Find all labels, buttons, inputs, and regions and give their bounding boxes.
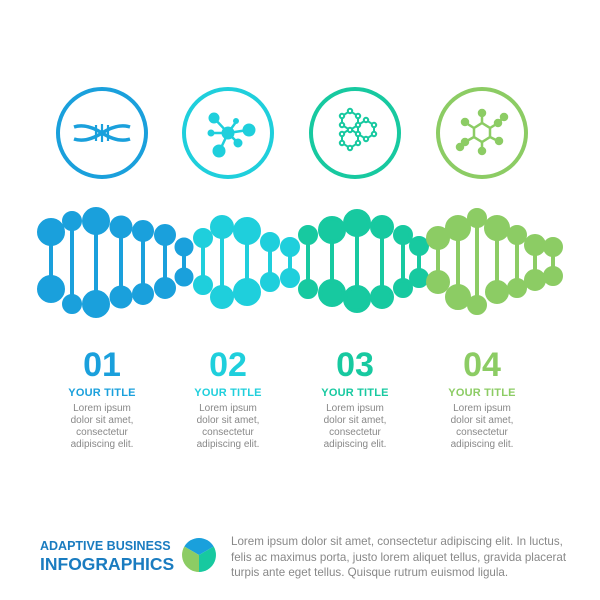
step 02: consectetur bbox=[202, 427, 254, 438]
step 04: 04 bbox=[463, 346, 501, 384]
step 04: dolor sit amet, bbox=[451, 415, 513, 426]
icon: molecule bbox=[184, 89, 272, 177]
step 01 bbox=[68, 346, 136, 450]
step 04: YOUR TITLE bbox=[448, 387, 516, 399]
dna helix chart bbox=[37, 207, 563, 318]
step 03: dolor sit amet, bbox=[324, 415, 386, 426]
icon: pie bbox=[182, 538, 216, 572]
step 03 bbox=[321, 346, 389, 450]
step 01: 01 bbox=[83, 346, 121, 384]
step 01: YOUR TITLE bbox=[68, 387, 136, 399]
step 03: consectetur bbox=[329, 427, 381, 438]
step 03: YOUR TITLE bbox=[321, 387, 389, 399]
step 04: Lorem ipsum bbox=[453, 403, 511, 414]
icon: ring molecule bbox=[438, 89, 526, 177]
step 01: consectetur bbox=[76, 427, 128, 438]
footer text: Lorem ipsum dolor sit amet, consectetur adipiscing elit. In luctus, felis ac maximus porta, justo lorem aliquet tellus, gravida placerat turpis ante eget tellus. Quisque rutrum euismod ligula. bbox=[231, 535, 566, 579]
step 03: adipiscing elit. bbox=[324, 439, 386, 450]
step 01: adipiscing elit. bbox=[71, 439, 133, 450]
step 01: Lorem ipsum bbox=[73, 403, 131, 414]
step 03: Lorem ipsum bbox=[326, 403, 384, 414]
step 04: adipiscing elit. bbox=[451, 439, 513, 450]
step 02: YOUR TITLE bbox=[194, 387, 262, 399]
step 04 bbox=[448, 346, 516, 450]
step 02: 02 bbox=[209, 346, 247, 384]
footer title bbox=[40, 539, 174, 574]
step 02 bbox=[194, 346, 262, 450]
footer title: ADAPTIVE BUSINESS bbox=[40, 539, 171, 553]
step 02: dolor sit amet, bbox=[197, 415, 259, 426]
step 04: consectetur bbox=[456, 427, 508, 438]
step 01: dolor sit amet, bbox=[71, 415, 133, 426]
step 02: adipiscing elit. bbox=[197, 439, 259, 450]
step 03: 03 bbox=[336, 346, 374, 384]
icon: dna bbox=[58, 89, 146, 177]
icon: hexagons bbox=[311, 89, 399, 177]
footer title: INFOGRAPHICS bbox=[40, 554, 174, 574]
step 02: Lorem ipsum bbox=[199, 403, 257, 414]
